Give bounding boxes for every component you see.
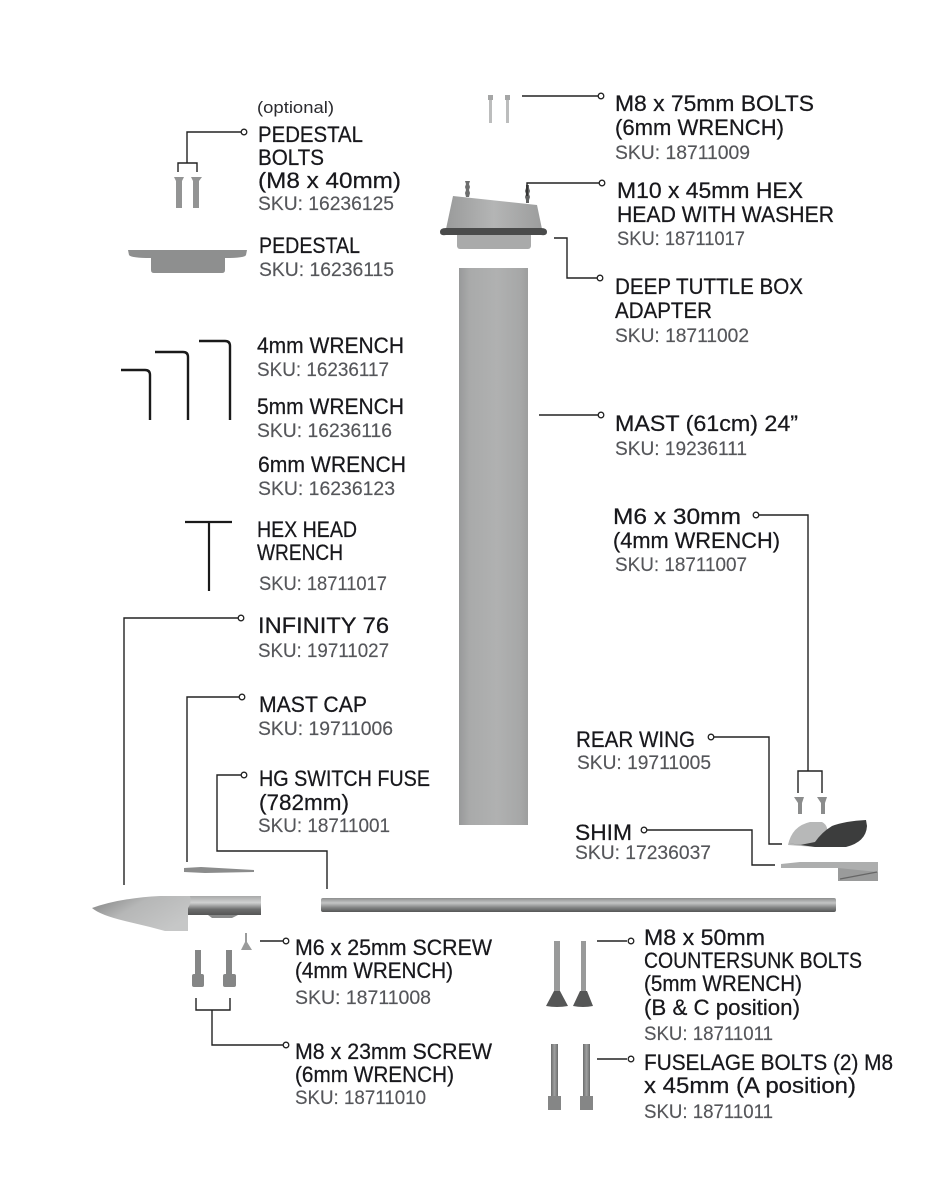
leader: infinity 76 (124, 615, 244, 885)
label: rear wing (576, 727, 711, 774)
label: deep tuttle box adapter (615, 274, 803, 347)
label: fuselage bolts: x 45mm (A position) (644, 1073, 856, 1098)
label: infinity 76 (258, 613, 389, 662)
leader: M8 x 75mm bolts (522, 93, 604, 99)
label: 5mm wrench (257, 394, 404, 442)
icon: front wing and fuselage head (92, 896, 261, 931)
leader: M10 x 45mm hex head (527, 180, 605, 196)
leader: mast cap (187, 694, 245, 862)
label: hex head wrench: WRENCH (257, 540, 343, 565)
label: hex head wrench: HEX HEAD (257, 517, 357, 542)
label: fuselage bolts: FUSELAGE BOLTS (2) M8 (644, 1050, 893, 1075)
label: 6mm wrench (258, 452, 406, 500)
label: M6 x 25mm screw: (4mm WRENCH) (295, 958, 453, 983)
label: mast cap: MAST CAP (259, 692, 367, 717)
icon: M8 x 23mm screws (192, 950, 236, 987)
label: rear wing: REAR WING (576, 727, 695, 752)
label: fuselage bolts (644, 1050, 893, 1123)
icon: M6 x 30mm screws (794, 797, 827, 814)
label: M8 x 50mm countersunk bolts: (B & C position) (644, 995, 800, 1020)
label: shim: SHIM (575, 820, 632, 845)
leader: shim (641, 827, 775, 865)
label: M6 x 30mm: M6 x 30mm (613, 504, 741, 529)
label: M8 x 23mm screw (295, 1039, 492, 1109)
label: 5mm wrench: SKU: 16236116 (257, 421, 392, 442)
label: pedestal bolts: PEDESTAL (258, 122, 363, 147)
label: 5mm wrench: 5mm WRENCH (257, 394, 404, 419)
label: pedestal (259, 233, 394, 281)
icon: shim and stabiliser (781, 862, 878, 881)
label: M8 x 75mm bolts: SKU: 18711009 (615, 143, 750, 164)
label: mast: SKU: 19236111 (615, 439, 747, 460)
icon: mast (459, 268, 528, 825)
icon: M8 x 75mm bolts (488, 95, 510, 123)
label: hex head wrench: SKU: 18711017 (259, 574, 387, 595)
leader: M6 x 25mm screw (260, 938, 289, 944)
label: HG switch fuse: HG SWITCH FUSE (259, 766, 430, 791)
label: mast (615, 411, 798, 460)
leader: deep tuttle box adapter (554, 238, 603, 281)
label: mast cap (258, 692, 393, 740)
label: HG switch fuse (258, 766, 430, 837)
label: M8 x 50mm countersunk bolts: COUNTERSUNK BOLTS (644, 948, 862, 973)
leader: rear wing (708, 734, 782, 844)
leader: M8 x 23mm screw (196, 998, 289, 1048)
label: fuselage bolts: SKU: 18711011 (644, 1102, 773, 1123)
label: M6 x 30mm (613, 504, 780, 576)
label: M10 x 45mm hex head: SKU: 18711017 (617, 229, 745, 250)
label: M6 x 30mm: SKU: 18711007 (615, 555, 747, 576)
label: shim: SKU: 17236037 (575, 843, 711, 864)
label: 4mm wrench: SKU: 16236117 (257, 360, 389, 381)
label: pedestal bolts (258, 122, 401, 215)
label: pedestal: PEDESTAL (259, 233, 360, 258)
label: M8 x 23mm screw: SKU: 18711010 (295, 1088, 426, 1109)
label: M8 x 75mm bolts: M8 x 75mm BOLTS (615, 91, 814, 116)
label: M10 x 45mm hex head: M10 x 45mm HEX (617, 178, 803, 203)
label: M8 x 50mm countersunk bolts: (5mm WRENCH) (644, 971, 802, 996)
icon: M6 x 25mm screw (241, 933, 252, 950)
icon: mast cap (184, 867, 254, 873)
leader: M8 x 50mm bolts (597, 938, 634, 944)
label: M6 x 25mm screw (295, 935, 492, 1009)
label: M8 x 23mm screw: (6mm WRENCH) (295, 1062, 454, 1087)
label: pedestal bolts: BOLTS (258, 145, 324, 170)
label: M6 x 25mm screw: SKU: 18711008 (295, 988, 431, 1009)
icon: fuselage bolts (548, 1044, 593, 1110)
label: shim (575, 820, 711, 864)
label: pedestal bolts: SKU: 16236125 (258, 194, 394, 215)
label: deep tuttle box adapter: SKU: 18711002 (615, 326, 749, 347)
label: mast: MAST (61cm) 24” (615, 411, 798, 436)
icon: rear wing (787, 820, 867, 847)
icon: fuselage tube (321, 898, 836, 912)
icon: deep tuttle box adapter (440, 181, 547, 249)
label: pedestal bolts: (M8 x 40mm) (258, 168, 401, 193)
label: M8 x 23mm screw: M8 x 23mm SCREW (295, 1039, 492, 1064)
label: 4mm wrench: 4mm WRENCH (257, 333, 404, 358)
label: M8 x 75mm bolts (615, 91, 814, 164)
label: pedestal: SKU: 16236115 (259, 260, 394, 281)
label: rear wing: SKU: 19711005 (577, 753, 711, 774)
label: deep tuttle box adapter: ADAPTER (615, 298, 712, 323)
label: infinity 76: INFINITY 76 (258, 613, 389, 638)
label: M8 x 50mm countersunk bolts: SKU: 18711011 (644, 1024, 773, 1045)
label: infinity 76: SKU: 19711027 (258, 641, 389, 662)
label: deep tuttle box adapter: DEEP TUTTLE BOX (615, 274, 803, 299)
label: M6 x 25mm screw: M6 x 25mm SCREW (295, 935, 492, 960)
label: 6mm wrench: 6mm WRENCH (258, 452, 406, 477)
label: M8 x 75mm bolts: (6mm WRENCH) (615, 115, 784, 140)
icon: hex wrenches (121, 341, 230, 420)
label: optional: (optional) (257, 98, 334, 117)
label: 4mm wrench (257, 333, 404, 381)
icon: countersunk bolts (546, 941, 593, 1007)
icon: pedestal (128, 250, 247, 273)
leader: mast (539, 412, 604, 418)
label: M8 x 50mm countersunk bolts: M8 x 50mm (644, 925, 765, 950)
label: hex head wrench (257, 517, 387, 595)
label: 6mm wrench: SKU: 16236123 (258, 479, 395, 500)
icon: pedestal bolts (174, 177, 202, 208)
leader: pedestal bolts (178, 129, 247, 172)
label: HG switch fuse: (782mm) (259, 790, 349, 815)
label: M10 x 45mm hex head (617, 178, 834, 250)
label: HG switch fuse: SKU: 18711001 (258, 816, 390, 837)
label: mast cap: SKU: 19711006 (258, 719, 393, 740)
leader: M6 x 30mm (753, 512, 822, 793)
leader: fuselage bolts (597, 1056, 634, 1062)
leader: HG switch fuse (217, 772, 327, 889)
label: M8 x 50mm countersunk bolts (644, 925, 862, 1045)
label: M6 x 30mm: (4mm WRENCH) (613, 528, 780, 553)
icon: hex head wrench (185, 522, 232, 591)
label: M10 x 45mm hex head: HEAD WITH WASHER (617, 202, 834, 227)
